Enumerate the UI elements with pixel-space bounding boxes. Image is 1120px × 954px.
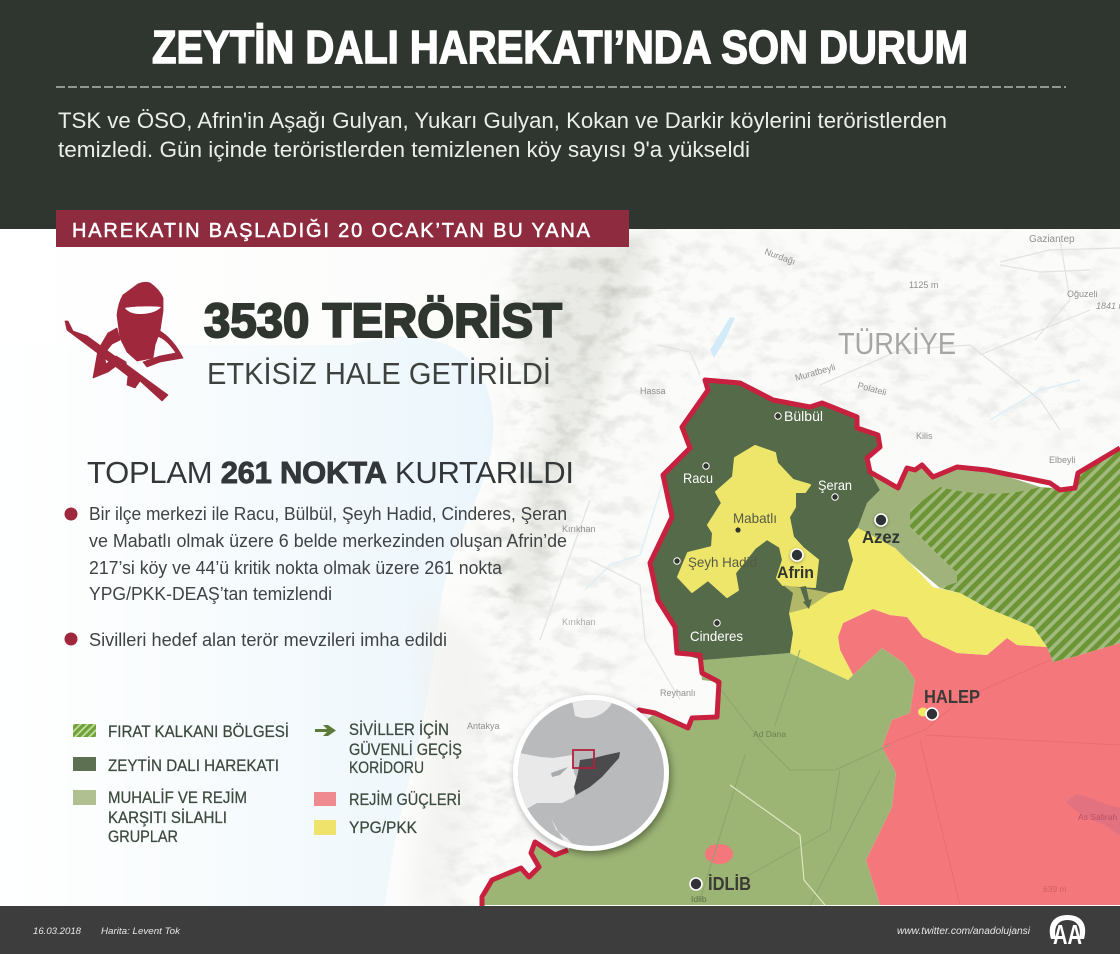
small map names on controlled land [691, 729, 1117, 904]
map regions [482, 380, 1120, 906]
small map names on controlled land: As Safirah [1078, 812, 1117, 822]
small map names on controlled land: 639 m [1043, 884, 1067, 894]
background place names: 1125 m [909, 280, 938, 290]
map label: Bülbül: Bülbül [784, 408, 823, 424]
inset: study area frame [573, 750, 594, 768]
inset locator map [500, 690, 670, 860]
legend: Muhalif: MUHALİF VE REJİM [108, 788, 247, 807]
map label: Halep: HALEP [924, 687, 980, 707]
map label: Afrin [777, 548, 813, 578]
bullet one: Bir ilçe merkezi ile Racu, Bülbül, Şeyh Hadid, Cinderes, Şeran [89, 504, 567, 524]
road lines on opposition land [700, 650, 890, 905]
banner: HAREKATIN BAŞLADIĞI 20 OCAK’TAN BU YANA [72, 219, 591, 242]
legend: YPG/PKK: YPG/PKK [349, 819, 417, 837]
map base [219, 229, 1120, 906]
map label: Cinderes [690, 619, 742, 641]
map label: Şeyh Hadid: Şeyh Hadid [688, 554, 757, 570]
bullet one [64, 504, 567, 604]
section heading: TOPLAM 261 NOKTA KURTARILDI [87, 455, 574, 490]
bullet list [64, 504, 567, 650]
background place names: Antakya [467, 721, 500, 731]
legend [73, 720, 462, 846]
header panel [0, 0, 1120, 229]
legend: safe corridor arrow [315, 720, 462, 777]
intro text: TSK ve ÖSO, Afrin'in Aşağı Gulyan, Yukarı Gulyan, Kokan ve Darkir köylerini teröristlerden [58, 108, 947, 133]
footer date: 16.03.2018 [33, 926, 82, 937]
intro text [58, 108, 947, 162]
region: YPG/PKK east [789, 528, 1047, 680]
legend: Zeytin Dali: ZEYTİN DALI HAREKATI [108, 756, 279, 775]
legend: Muhalif [73, 788, 247, 846]
map label: İdlib [689, 874, 750, 891]
background place names: Kilis [916, 431, 933, 441]
background place names [467, 234, 1120, 731]
title: ZEYTİN DALI HAREKATI’NDA SON DURUM [152, 22, 968, 74]
bullet one: YPG/PKK-DEAŞ’tan temizlendi [89, 584, 332, 604]
legend: safe corridor arrow: SİVİLLER İÇİN [349, 720, 449, 739]
inset: Syria [574, 752, 620, 795]
legend: regime: REJİM GÜÇLERİ [349, 790, 461, 809]
legend: regime [314, 790, 461, 809]
label: Türkiye: TÜRKİYE [838, 326, 956, 361]
region: As Safirah [1066, 794, 1120, 836]
map label: Şeran [818, 480, 852, 501]
footer band [0, 906, 1120, 954]
map label: Racu [684, 462, 712, 483]
icon: masked terrorist with rifle [65, 282, 183, 401]
background place names: Kırıkhan [562, 524, 596, 534]
background place names: Gaziantep [1029, 234, 1075, 245]
background place names: Muratbeyli [794, 362, 836, 383]
stat headline: 3530 TERÖRİST [204, 295, 562, 348]
region: opposition south [482, 648, 915, 905]
bullet two: Sivilleri hedef alan terör mevzileri imha edildi [89, 630, 447, 650]
footer url: www.twitter.com/anadolujansi [897, 926, 1031, 937]
icon: agency logo: AA [1053, 919, 1082, 950]
region: Idlib regime pocket [705, 844, 733, 864]
dashed divider [56, 86, 1066, 88]
region: Firat Kalkani hatch [910, 448, 1120, 662]
border: Turkey-Syria [482, 380, 1120, 906]
background place names: Polateli [856, 380, 888, 398]
banner [56, 210, 629, 247]
map label: İdlib: İDLİB [708, 874, 751, 894]
map label: Şeran: Şeran [818, 477, 852, 493]
sea [262, 337, 494, 906]
map label: Bülbül [774, 411, 822, 421]
legend: YPG/PKK [314, 819, 417, 837]
bullet one: ve Mabatlı olmak üzere 6 belde merkezinden oluşan Afrin’de [89, 531, 567, 551]
map label: Azez [862, 512, 900, 543]
region: YPG/PKK interior [678, 446, 818, 597]
lake and rivers [540, 240, 1120, 700]
region: regime forces [838, 609, 1120, 905]
small map names on controlled land: Idlib [691, 894, 707, 904]
legend: safe corridor arrow: GÜVENLİ GEÇİŞ [349, 740, 462, 759]
legend: Firat Kalkani: FIRAT KALKANI BÖLGESİ [108, 722, 289, 741]
map label: Afrin: Afrin [777, 563, 814, 582]
region: opposition north [848, 465, 1040, 588]
map label: Mabatlı [734, 513, 776, 533]
background place names: Oğuzeli [1067, 289, 1098, 299]
intro text: temizledi. Gün içinde teröristlerden temizlenen köy sayısı 9'a yükseldi [58, 137, 750, 162]
stat subheading: ETKİSİZ HALE GETİRİLDİ [207, 356, 551, 391]
region: safe corridor [783, 585, 830, 613]
inset: Mediterranean [518, 700, 612, 808]
hill shading [380, 229, 1120, 906]
map label: Azez: Azez [862, 527, 900, 547]
icon: corridor arrow [800, 586, 812, 609]
background place names: Hassa [640, 386, 666, 396]
footer credit: Harita: Levent Tok [101, 926, 181, 937]
background place names: Kırıkhan [562, 617, 596, 627]
small map names on controlled land: Ad Dana [753, 729, 786, 739]
map label: Cinderes: Cinderes [690, 628, 743, 644]
bullet one: 217’si köy ve 44’ü kritik nokta olmak üzere 261 nokta [89, 558, 503, 578]
map label: Mabatlı: Mabatlı [733, 510, 777, 526]
background place names: Nurdağı [763, 246, 797, 267]
map label: Şeyh Hadid [673, 557, 756, 570]
region: Zeytin Dali [650, 380, 880, 660]
map label: Halep [918, 687, 980, 720]
legend: Muhalif: GRUPLAR [108, 828, 178, 846]
legend: safe corridor arrow: KORİDORU [349, 758, 424, 777]
background place names: Reyhanlı [660, 688, 696, 698]
icon: agency logo [1050, 915, 1085, 950]
legend: Muhalif: KARŞITI SİLAHLI [108, 808, 227, 827]
background place names: Elbeyli [1049, 455, 1076, 465]
map label: Racu: Racu [683, 470, 713, 486]
